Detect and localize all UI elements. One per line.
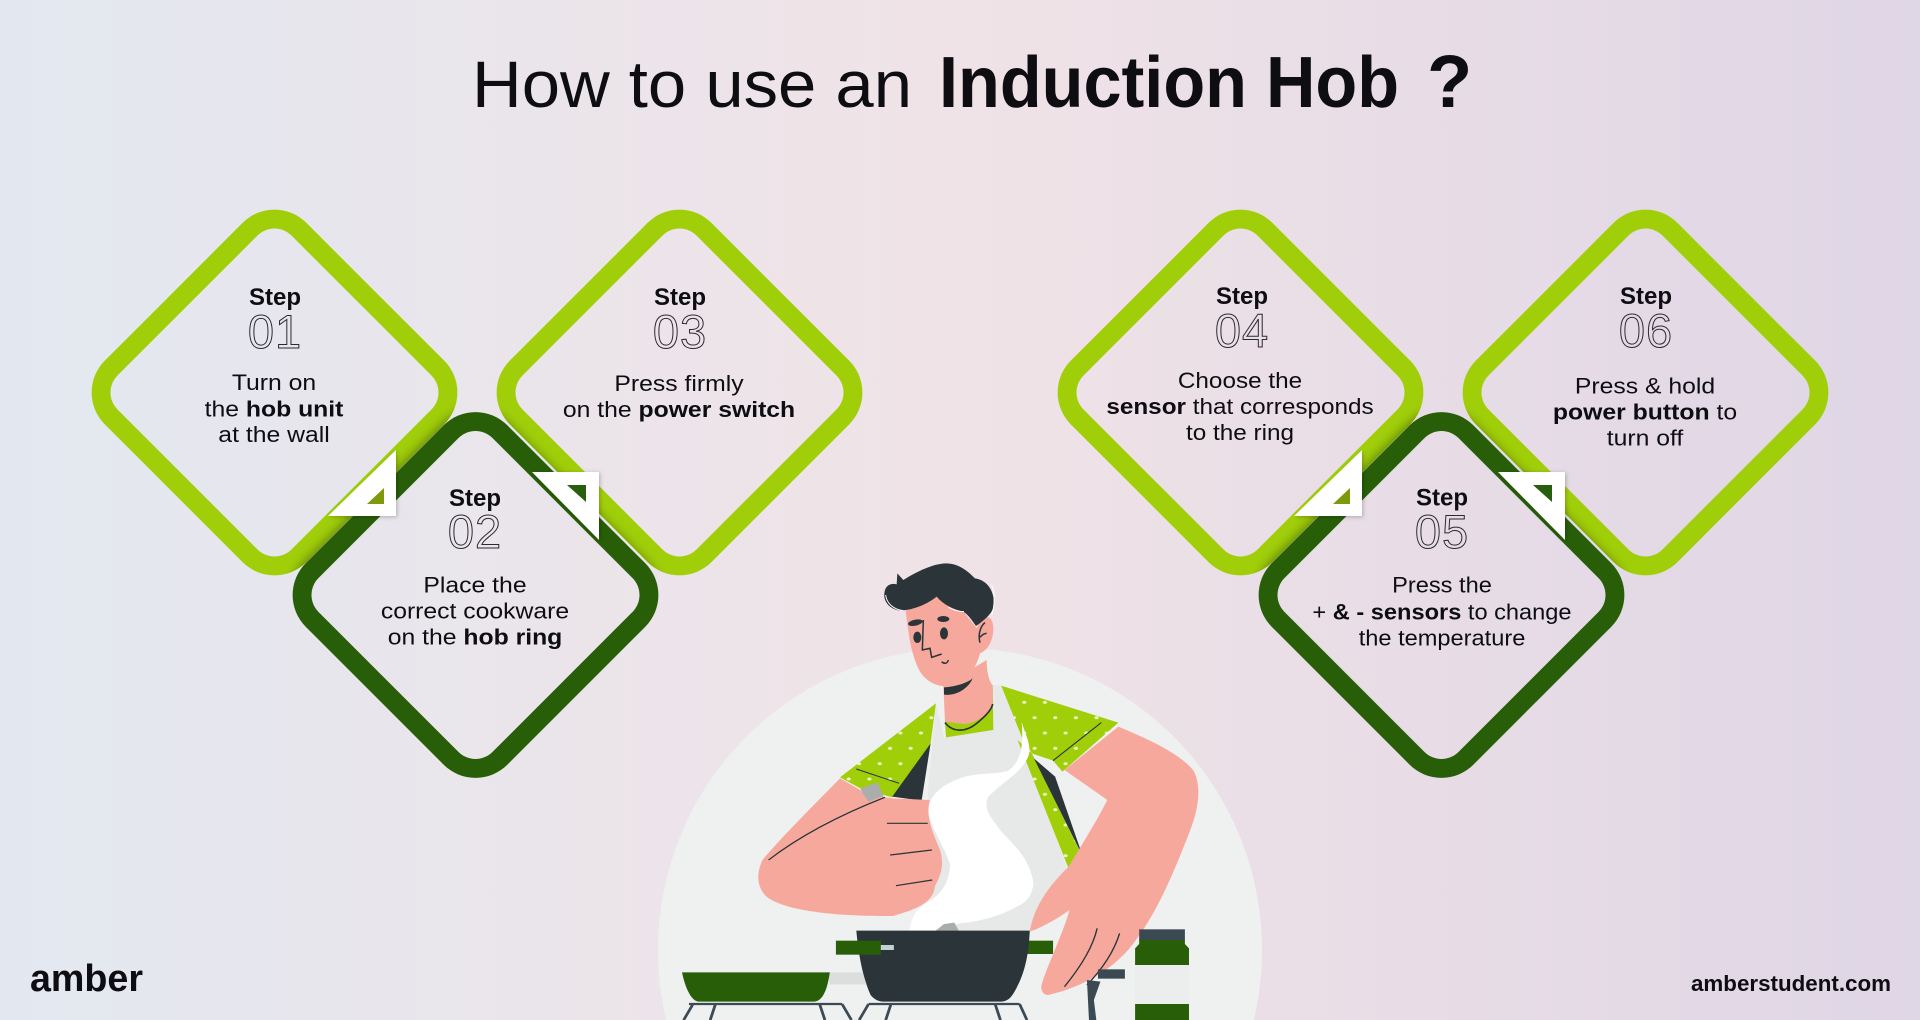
title: Induction Hob	[939, 43, 1399, 123]
panel: step 05: 05	[1415, 505, 1469, 558]
panel: step 02: Place the	[423, 573, 527, 598]
panel: step 06: Step	[1620, 283, 1672, 310]
panel: step 02	[290, 408, 660, 778]
neck	[943, 660, 993, 724]
panel: step 06: 06	[1619, 304, 1673, 357]
website url: amberstudent.com	[1691, 971, 1891, 996]
panel: step 04: 04	[1215, 304, 1269, 357]
panel: step 04: Choose the	[1178, 368, 1302, 393]
apron straps shadow	[892, 743, 1083, 857]
spoon	[1087, 969, 1125, 1020]
jar	[1135, 929, 1189, 1020]
panel: step 01: Turn on	[232, 371, 316, 396]
panel: step 01: Step	[249, 284, 301, 311]
pot	[856, 931, 1030, 1002]
left pot handle	[836, 941, 894, 955]
panel: step 02: Step	[449, 485, 501, 512]
panel: step 06: power button to	[1553, 400, 1737, 425]
fold: step 01 corner	[328, 450, 396, 516]
hob stands	[684, 1004, 1027, 1020]
panel: step 03	[478, 191, 881, 594]
panel: step 02: 02	[448, 505, 502, 558]
arm and finger lines	[769, 797, 1120, 987]
hair	[884, 563, 994, 626]
panel: step 04: Step	[1216, 283, 1268, 310]
right pot handle	[1027, 941, 1053, 954]
panel: step 05: + & - sensors to change	[1312, 599, 1572, 624]
pot lid knob	[935, 923, 959, 931]
apron	[909, 685, 1067, 932]
sleeve lines	[856, 723, 1101, 783]
neck shadow	[944, 678, 973, 695]
face	[906, 597, 983, 686]
panel: step 03: Step	[654, 284, 706, 311]
eyes	[908, 616, 949, 643]
fold: step 04 corner	[1294, 450, 1362, 516]
panel: step 04: sensor that corresponds	[1106, 394, 1374, 419]
steam	[909, 722, 1033, 931]
logo: amber: amber	[30, 958, 143, 1000]
panel: step 01: 01	[248, 305, 302, 358]
panel: step 03: 03	[653, 305, 707, 358]
illustration: man cooking	[682, 563, 1198, 1020]
panel: step 05: Step	[1416, 484, 1468, 512]
backdrop circle	[658, 648, 1262, 1020]
title: ?	[1427, 40, 1472, 123]
grey utensil	[860, 782, 884, 803]
panel: step 03: on the power switch	[563, 398, 795, 423]
panel: step 02: on the hob ring	[388, 625, 562, 650]
fold: step 02 corner	[532, 472, 599, 540]
frying pan	[682, 972, 830, 1002]
panel: step 06	[1444, 191, 1847, 594]
hair highlights	[886, 585, 994, 615]
panel: step 01	[73, 191, 476, 594]
panel: step 01: at the wall	[218, 423, 330, 448]
left arm and hand	[758, 778, 942, 916]
collar line	[945, 704, 993, 730]
panel: step 01: the hob unit	[205, 397, 344, 422]
right arm and hand	[1030, 727, 1198, 995]
panel: step 06: Press & hold	[1575, 374, 1715, 399]
panel: step 04	[1039, 191, 1442, 594]
frying pan handle	[828, 972, 867, 984]
shirt	[840, 686, 1118, 867]
fold: step 05 corner	[1498, 472, 1565, 540]
title	[472, 40, 1472, 123]
title: How to use an	[472, 47, 912, 121]
collar	[945, 685, 993, 737]
panel: step 06: turn off	[1607, 426, 1684, 451]
panel: step 04: to the ring	[1186, 420, 1294, 445]
ear	[977, 617, 993, 653]
nose and mouth	[922, 620, 987, 663]
panel: step 02: correct cookware	[381, 599, 569, 624]
panel: step 05: the temperature	[1359, 625, 1525, 650]
panel: step 03: Press firmly	[614, 372, 744, 397]
panel: step 05: Press the	[1392, 572, 1492, 597]
head and neck	[884, 563, 994, 737]
panel: step 05	[1256, 408, 1626, 778]
